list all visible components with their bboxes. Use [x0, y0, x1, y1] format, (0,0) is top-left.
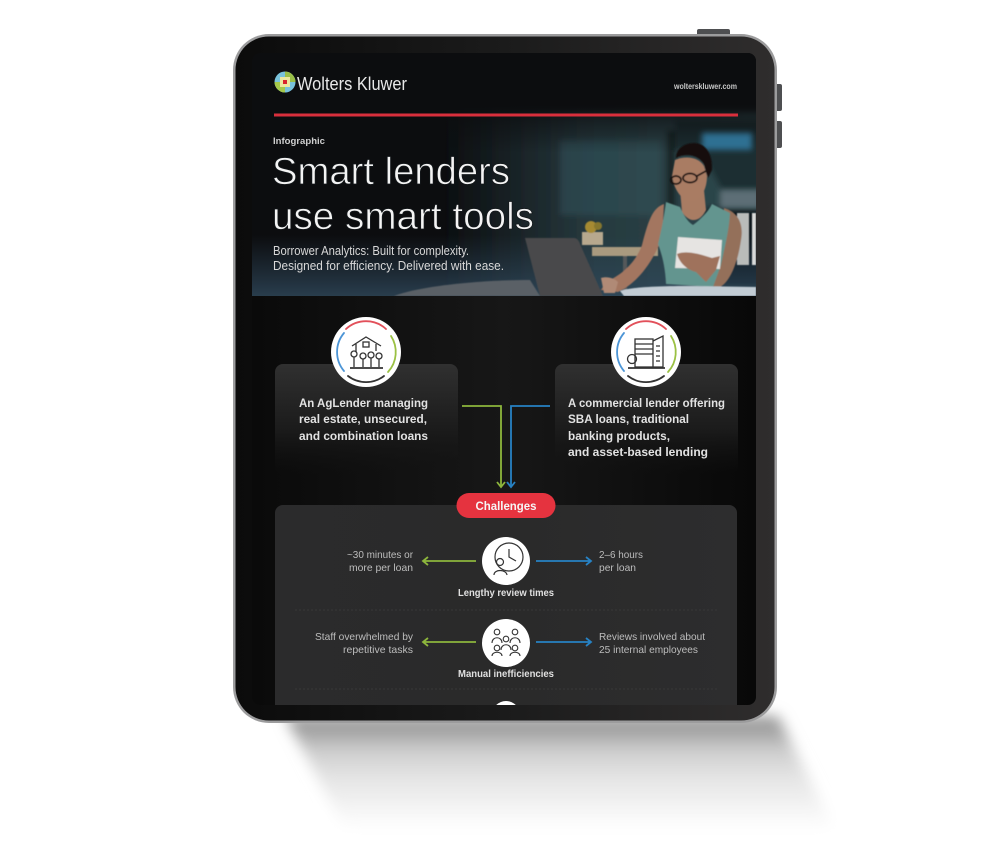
hand: [677, 252, 720, 282]
text: [299, 398, 428, 440]
icon: Wolters Kluwer globe: [274, 72, 296, 92]
panel: AgLender: [275, 317, 458, 445]
hero photo: woman at a laptop in a dark office: [252, 53, 770, 300]
icon: farm house: [331, 317, 401, 387]
panel: commercial lender: [555, 317, 738, 474]
text: and combination loans: [299, 429, 428, 443]
text: banking products,: [568, 429, 670, 443]
badge: challenges: [456, 493, 556, 518]
arrow: right blue: [536, 638, 591, 646]
arrow: left green: [423, 557, 476, 565]
row: lengthy review times: more per loan: [349, 562, 413, 574]
hair: [676, 143, 712, 178]
red rule: [274, 114, 738, 116]
right arm: [712, 208, 742, 288]
row: lengthy review times: 2–6 hours: [599, 549, 643, 561]
title: [274, 156, 533, 230]
bench: [394, 280, 540, 296]
website: wolterskluwer.com: [673, 82, 737, 91]
neck: [680, 190, 706, 220]
subtitle: Borrower Analytics: Built for complexity.: [273, 244, 469, 258]
text: and asset-based lending: [568, 445, 708, 459]
sleeveless top: [658, 202, 730, 287]
arrow: left green: [423, 638, 476, 646]
subtitle: [273, 244, 504, 273]
icon: office building: [611, 317, 681, 387]
row: lengthy review times: [347, 537, 643, 599]
row: manual inefficiencies: repetitive tasks: [343, 644, 413, 656]
tablet: [675, 237, 722, 269]
desk and plant: [592, 247, 658, 256]
icon: clock and person: [482, 537, 530, 585]
text: SBA loans, traditional: [568, 412, 689, 426]
face: [672, 158, 707, 202]
title: Smart lenders: [272, 151, 510, 193]
binders: [737, 213, 749, 265]
wordmark: Wolters Kluwer: [297, 73, 407, 94]
text: A commercial lender offering: [568, 396, 725, 410]
row: manual inefficiencies: Reviews involved about: [599, 631, 705, 643]
laptop: [525, 238, 603, 296]
glasses: [671, 171, 706, 184]
table front: [620, 286, 756, 296]
logo: [274, 72, 737, 94]
tablet drop shadow: [285, 716, 835, 830]
text: real estate, unsecured,: [299, 412, 427, 426]
screen: [252, 53, 770, 729]
row: manual inefficiencies: [315, 619, 705, 680]
row: lengthy review times: Lengthy review times: [458, 587, 554, 599]
eyebrow label: Infographic: [273, 136, 325, 147]
side buttons: [697, 29, 782, 148]
row: manual inefficiencies: Manual inefficiencies: [458, 668, 554, 680]
hand on laptop: [601, 277, 618, 293]
row: manual inefficiencies: 25 internal employees: [599, 644, 698, 656]
row: lengthy review times: per loan: [599, 562, 636, 574]
arrow: green connector: [462, 406, 505, 487]
text: [568, 396, 725, 459]
left arm: [601, 204, 664, 292]
row: lengthy review times: ~30 minutes or: [347, 549, 413, 561]
subtitle: Designed for efficiency. Delivered with ease.: [273, 259, 504, 273]
arrow: right blue: [536, 557, 591, 565]
panel: challenges: [275, 505, 737, 705]
icon: group of people: [482, 619, 530, 667]
arrow: blue connector: [507, 406, 550, 487]
row: manual inefficiencies: Staff overwhelmed by: [315, 631, 414, 643]
title: use smart tools: [272, 196, 534, 238]
badge: challenges: Challenges: [476, 499, 537, 513]
text: An AgLender managing: [299, 396, 428, 410]
icon: cut-off circle: [492, 701, 520, 729]
tablet device: [233, 29, 782, 729]
